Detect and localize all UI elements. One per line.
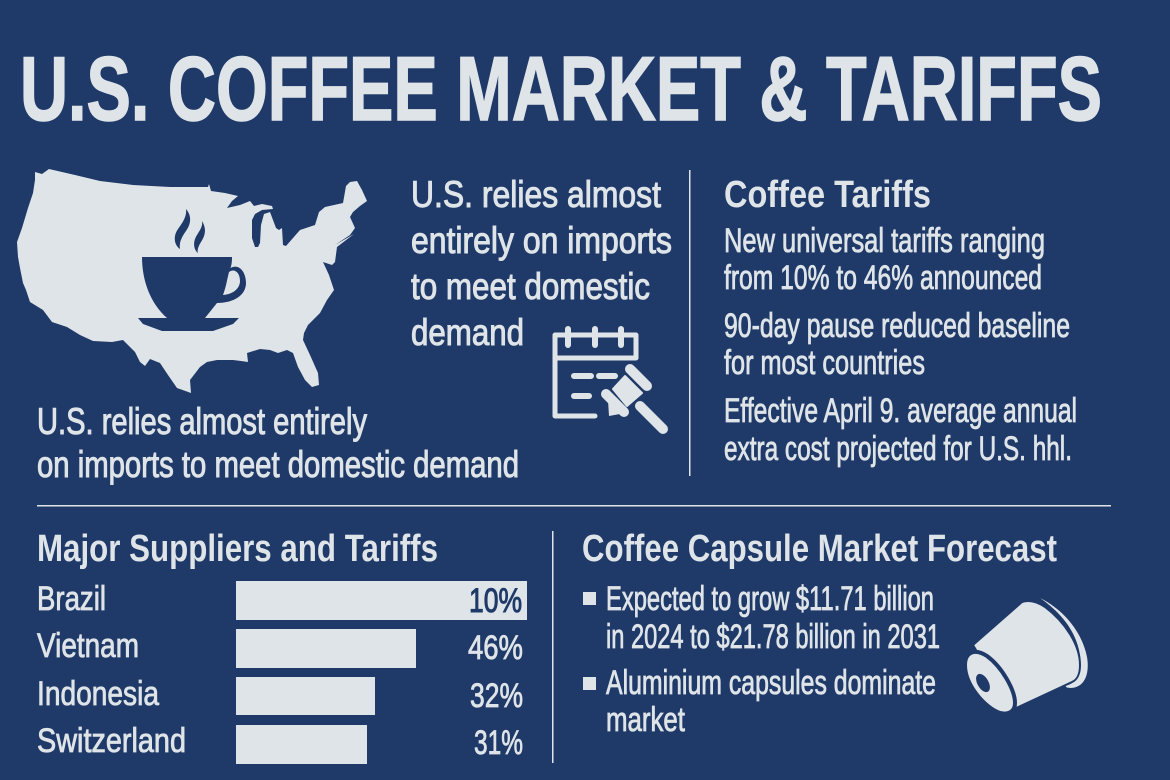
bar chart: suppliers: 46% bbox=[468, 629, 523, 667]
bar chart: suppliers: 10% bbox=[469, 582, 522, 620]
bar chart: suppliers: Indonesia bbox=[37, 675, 159, 713]
text: tariff details bbox=[724, 222, 1077, 468]
heading: major suppliers: Major Suppliers and Tariffs bbox=[37, 528, 438, 570]
text: map caption: U.S. relies almost entirely bbox=[37, 401, 367, 442]
text: map caption: on imports to meet domestic demand bbox=[37, 444, 519, 485]
icon: coffee capsule bbox=[965, 598, 1088, 714]
divider: bottom vertical bbox=[552, 531, 554, 763]
bar chart: suppliers bbox=[37, 580, 527, 764]
bar chart: suppliers: 32% bbox=[470, 677, 523, 715]
panel: coffee capsule market forecast bbox=[582, 528, 1088, 739]
text: tariff details: New universal tariffs ranging bbox=[724, 222, 1045, 260]
panel: coffee tariffs bbox=[724, 174, 1077, 468]
list: forecast bullets: Expected to grow $11.71 billion bbox=[606, 580, 934, 618]
text: tariff details: for most countries bbox=[724, 344, 925, 382]
list: forecast bullets: market bbox=[606, 701, 685, 739]
heading: coffee tariffs: Coffee Tariffs bbox=[724, 174, 931, 216]
divider: horizontal bbox=[37, 505, 1111, 506]
list: forecast bullets: Aluminium capsules dominate bbox=[606, 664, 936, 702]
text: import reliance statement: demand bbox=[411, 312, 524, 353]
bar chart: suppliers: Vietnam bbox=[37, 627, 139, 665]
bar chart: suppliers: 31% bbox=[474, 724, 523, 762]
icon: calendar and gavel bbox=[555, 329, 663, 429]
list: forecast bullets: in 2024 to $21.78 billion in 2031 bbox=[606, 618, 940, 656]
list: forecast bullets bbox=[583, 580, 940, 739]
panel: major suppliers and tariffs bbox=[37, 528, 527, 764]
text: import reliance statement: entirely on imports bbox=[411, 220, 672, 261]
bar chart: suppliers: Switzerland bbox=[37, 722, 186, 760]
text: import reliance statement: to meet domestic bbox=[411, 266, 650, 307]
heading: capsule forecast: Coffee Capsule Market Forecast bbox=[582, 528, 1057, 570]
text: map caption bbox=[37, 401, 519, 485]
icon: coffee cup bbox=[138, 209, 246, 331]
divider: top vertical bbox=[689, 170, 690, 476]
bar chart: suppliers: Brazil bbox=[37, 580, 106, 618]
icon: U.S. map with coffee cup bbox=[17, 169, 367, 393]
text: import reliance statement bbox=[411, 174, 672, 353]
text: import reliance statement: U.S. relies almost bbox=[411, 174, 662, 215]
text: tariff details: from 10% to 46% announced bbox=[724, 259, 1042, 297]
